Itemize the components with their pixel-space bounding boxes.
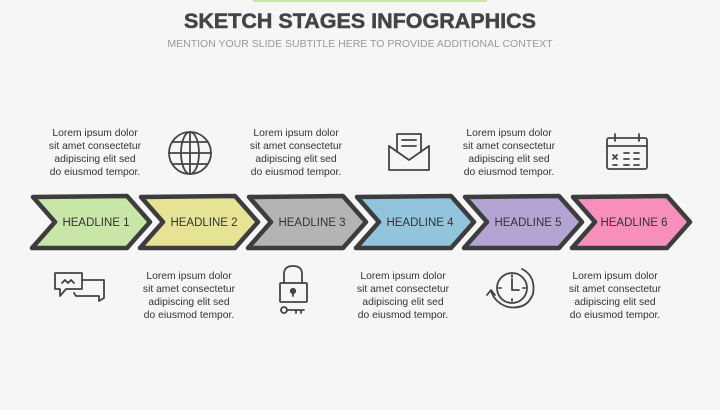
bottom text 2: Lorem ipsum dolor (146, 271, 232, 282)
chevron 3: HEADLINE 3 (278, 217, 346, 229)
top text 5: Lorem ipsum dolor (466, 128, 552, 139)
subtitle: MENTION YOUR SLIDE SUBTITLE HERE TO PROVIDE ADDITIONAL CONTEXT (167, 38, 553, 50)
chevron 5: HEADLINE 5 (494, 217, 562, 229)
bottom text 6: adipiscing elit sed (574, 297, 656, 308)
top text 1 (49, 128, 142, 178)
icon: clock (487, 269, 534, 307)
icon: calendar (607, 134, 647, 169)
top text 3: do eiusmod tempor. (251, 167, 341, 178)
top text 3: adipiscing elit sed (255, 154, 337, 165)
bottom text 6: do eiusmod tempor. (570, 310, 660, 321)
top text 1: adipiscing elit sed (54, 154, 136, 165)
top text 5 (463, 128, 556, 178)
icon: chat bubbles (55, 273, 104, 301)
chevron 1 (32, 196, 150, 248)
chevron row (32, 196, 690, 248)
chevron 6: HEADLINE 6 (600, 217, 668, 229)
top text 1: Lorem ipsum dolor (52, 128, 138, 139)
chevron 6 (572, 196, 690, 248)
top text 3: sit amet consectetur (250, 141, 343, 152)
bottom text 4: sit amet consectetur (357, 284, 450, 295)
title: SKETCH STAGES INFOGRAPHICS (184, 9, 536, 33)
icon: padlock with key (280, 266, 307, 313)
top text 5: do eiusmod tempor. (464, 167, 554, 178)
bottom text 2: do eiusmod tempor. (144, 310, 234, 321)
bottom text 4 (357, 271, 450, 321)
icon: globe (169, 132, 211, 174)
chevron 4: HEADLINE 4 (386, 217, 454, 229)
top text 3 (250, 128, 343, 178)
bottom text 2: sit amet consectetur (143, 284, 236, 295)
bottom text 2 (143, 271, 236, 321)
bottom text 4: adipiscing elit sed (362, 297, 444, 308)
bottom text 6 (569, 271, 662, 321)
chevron 2 (140, 196, 258, 248)
chevron 1: HEADLINE 1 (62, 217, 130, 229)
chevron 3 (248, 196, 366, 248)
bottom text 4: Lorem ipsum dolor (360, 271, 446, 282)
top text 1: sit amet consectetur (49, 141, 142, 152)
bottom text 4: do eiusmod tempor. (358, 310, 448, 321)
icon: envelope (389, 134, 429, 170)
bottom text 6: sit amet consectetur (569, 284, 662, 295)
top text 1: do eiusmod tempor. (50, 167, 140, 178)
top text 3: Lorem ipsum dolor (253, 128, 339, 139)
chevron 4 (356, 196, 474, 248)
chevron 2: HEADLINE 2 (170, 217, 238, 229)
chevron 5 (464, 196, 582, 248)
top text 5: adipiscing elit sed (468, 154, 550, 165)
bottom text 2: adipiscing elit sed (148, 297, 230, 308)
bottom text 6: Lorem ipsum dolor (572, 271, 658, 282)
top text 5: sit amet consectetur (463, 141, 556, 152)
